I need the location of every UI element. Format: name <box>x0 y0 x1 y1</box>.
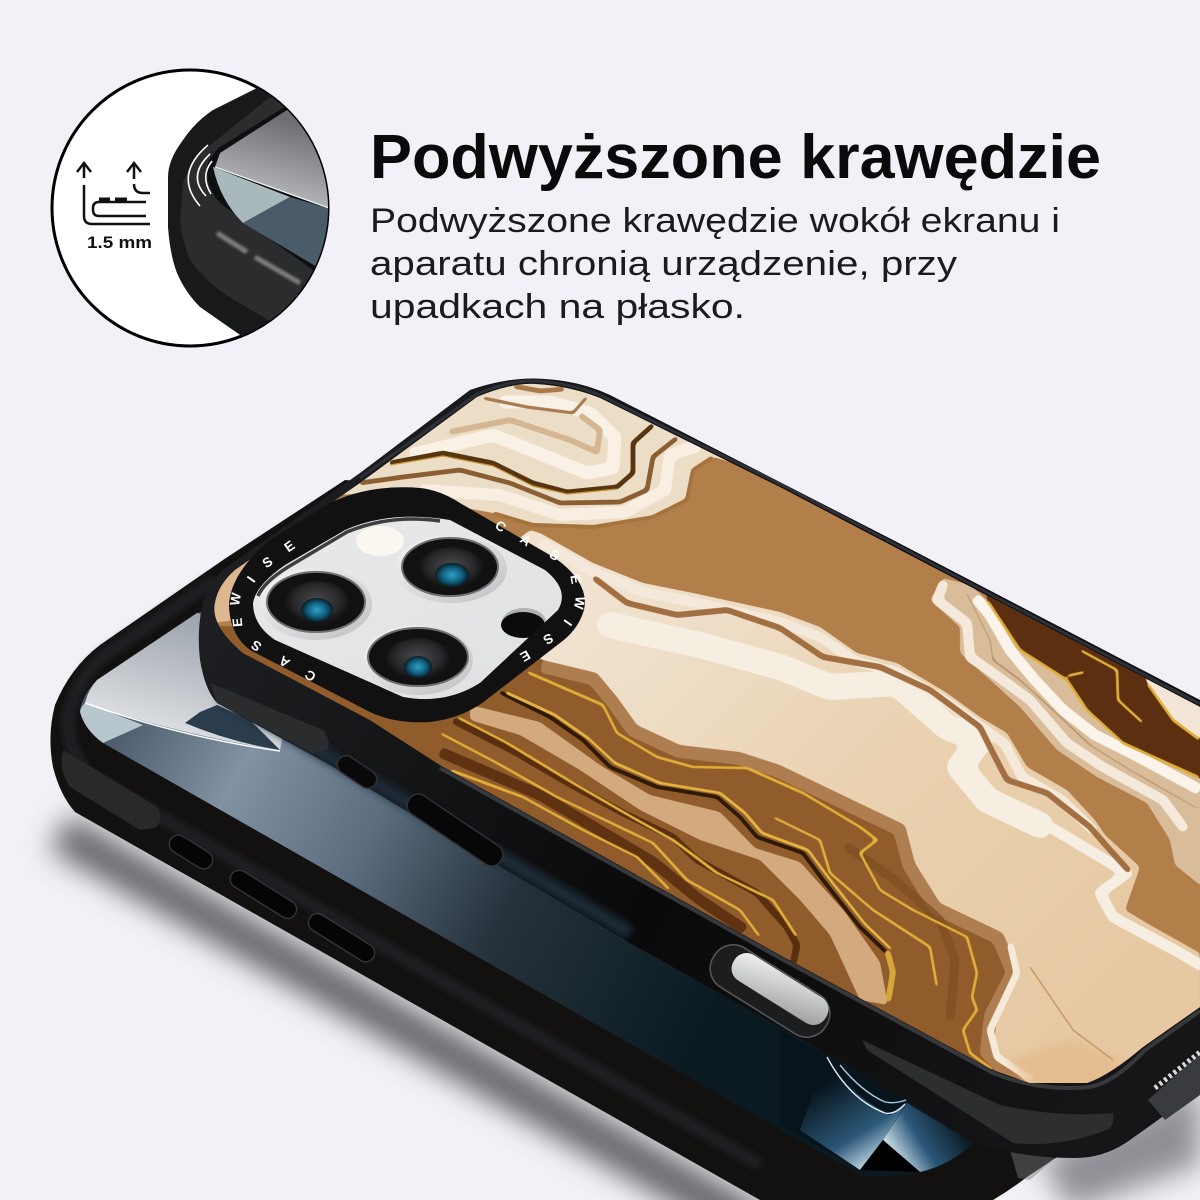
upper rim light <box>360 381 1200 704</box>
ring text: CASEWISE: C <box>302 667 319 685</box>
ring text: CASEWISE: A <box>276 653 293 671</box>
lower phone screen <box>80 560 1000 1176</box>
drop shadows <box>50 815 1200 1200</box>
upper white vein <box>540 542 1095 832</box>
mottled corner <box>1008 1040 1122 1083</box>
upper phone <box>199 360 1200 1158</box>
flash <box>356 526 404 556</box>
brown edge band <box>543 660 1027 1083</box>
icon: 1.5 mm raised edge diagram <box>77 163 150 224</box>
top cream area <box>343 384 728 529</box>
screen curve highlight <box>85 703 280 751</box>
label: 1.5 mm: 1.5 mm <box>87 234 152 252</box>
side navy tint <box>222 695 630 933</box>
upper left pad <box>210 683 329 753</box>
ring text: CASEWISE <box>227 517 588 685</box>
side button small <box>334 752 380 792</box>
left marble sliver <box>214 560 250 622</box>
marble back panel <box>214 384 1200 1083</box>
lower brown agate band <box>440 672 993 1070</box>
charging port <box>702 937 838 1045</box>
description text: Podwyższone krawędzie wokół ekranu i <box>370 202 1060 240</box>
heading: Podwyższone krawędzie <box>370 123 1101 192</box>
description text: upadkach na płasko. <box>370 288 745 326</box>
ring text: CASEWISE: W <box>571 595 588 611</box>
lower phone <box>50 480 1060 1200</box>
gold veins <box>440 672 993 1070</box>
ring text: CASEWISE: S <box>541 630 556 648</box>
lower phone bottom pad <box>62 750 161 830</box>
camera plate <box>253 517 562 699</box>
upper right agate band <box>930 575 1200 885</box>
lidar sensor <box>501 608 546 638</box>
lens bottom <box>363 625 473 695</box>
screen reflection <box>780 1030 973 1172</box>
ring text: CASEWISE: C <box>492 517 509 535</box>
upper phone body <box>199 378 1200 1158</box>
lower phone frame <box>50 480 1060 1200</box>
lens right <box>395 535 507 603</box>
fine crack <box>1030 967 1113 1060</box>
central cream band <box>506 530 1200 1083</box>
ring text: CASEWISE: A <box>517 531 534 549</box>
light inner stripe <box>470 705 888 1005</box>
camera module <box>227 487 588 722</box>
bottom speaker <box>1148 1052 1200 1120</box>
gold patch <box>887 950 893 1002</box>
ring text: CASEWISE: I <box>560 617 575 628</box>
ring text: CASEWISE: E <box>518 647 533 665</box>
ring text: CASEWISE: I <box>244 574 259 585</box>
dark brown inclusion <box>986 596 1200 778</box>
black gold vein <box>500 692 887 953</box>
ring text: CASEWISE: E <box>281 538 297 555</box>
camera ring <box>229 487 585 722</box>
screen navy fold <box>185 705 280 750</box>
lower phone buttons <box>166 832 378 965</box>
broad white vein <box>610 625 1040 825</box>
ring text: CASEWISE: E <box>230 617 245 628</box>
rim light <box>440 768 1200 1088</box>
ring text: CASEWISE: S <box>248 637 264 654</box>
screen pale triangle <box>80 703 143 743</box>
description text <box>370 202 1060 326</box>
brown agate base <box>200 625 1040 1100</box>
icon: impact waves <box>188 145 212 206</box>
phone corner close-up <box>168 88 328 336</box>
brown vein under tan <box>593 577 1130 872</box>
ring text: CASEWISE: S <box>259 554 275 571</box>
inset circle: raised edge close-up <box>52 70 340 346</box>
dark bands <box>453 720 797 965</box>
phone illustration <box>50 360 1200 1200</box>
ring text: CASEWISE: E <box>567 573 584 585</box>
pale corner <box>1146 679 1200 738</box>
lower phone corner edge <box>1010 1150 1055 1180</box>
ring text: CASEWISE: S <box>547 547 563 564</box>
screen light pane <box>85 613 300 750</box>
description text: aparatu chronią urządzenie, przy <box>370 245 957 283</box>
ring inner wall <box>258 519 440 596</box>
ring text: CASEWISE: W <box>227 591 244 607</box>
frame inner light band <box>68 580 760 1165</box>
side button long <box>403 790 507 870</box>
lower right pad <box>862 1040 1113 1144</box>
lower boundary white vein <box>990 943 1033 1080</box>
lens left <box>260 568 372 640</box>
base tan <box>200 370 1200 1130</box>
